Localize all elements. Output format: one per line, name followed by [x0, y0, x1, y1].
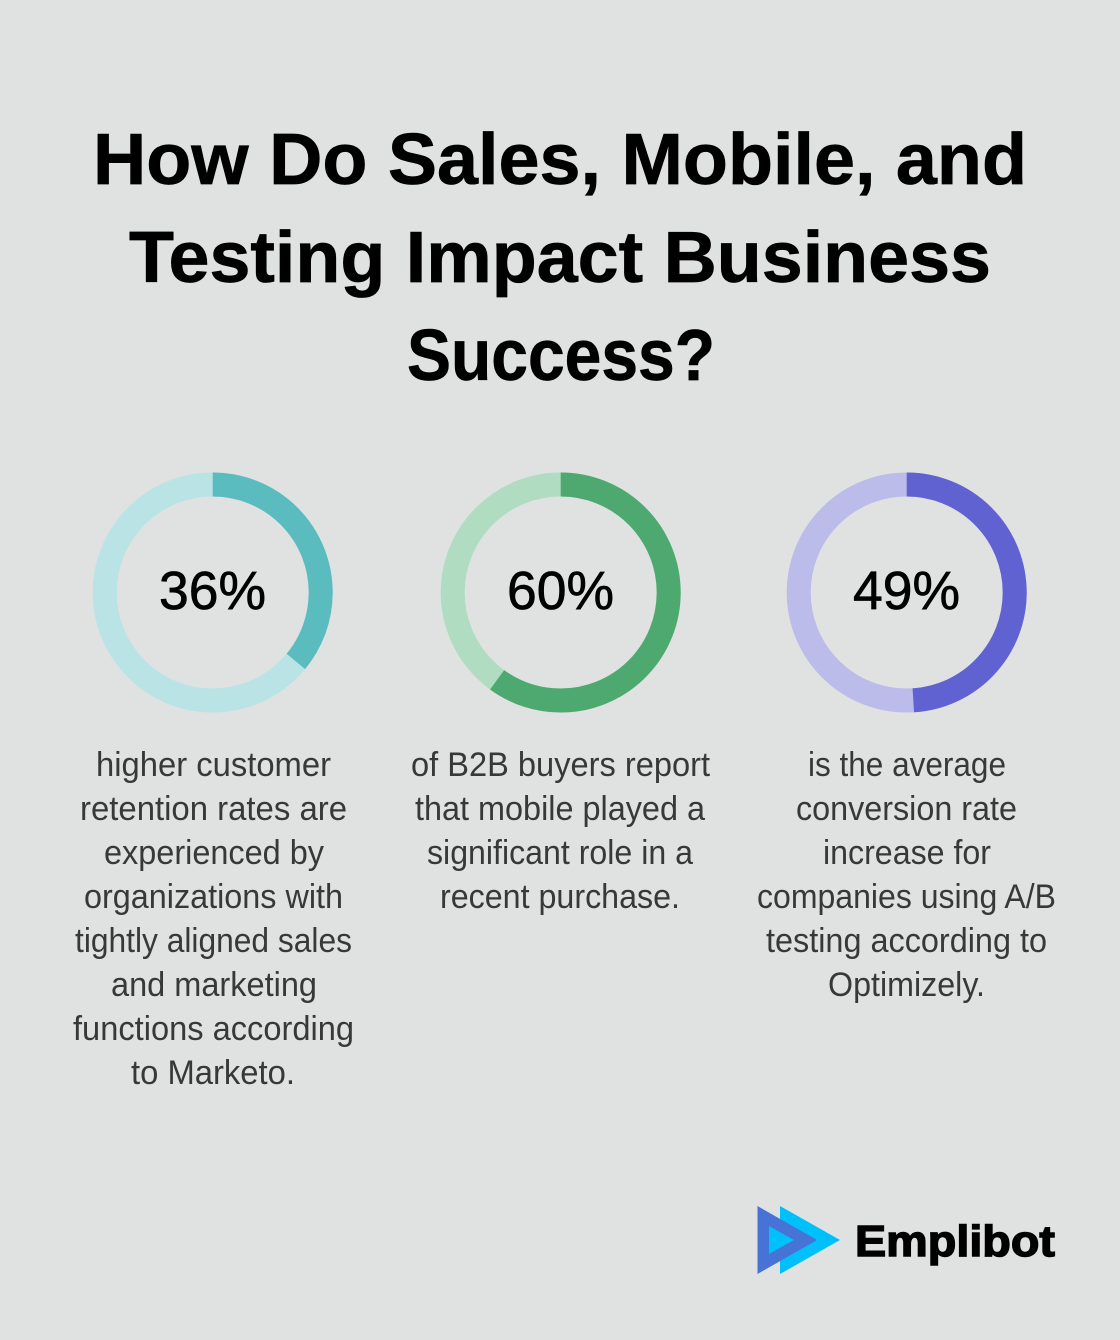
- description: A/B testing: testing according to: [766, 922, 1047, 960]
- title: Testing Impact Business: [129, 218, 991, 298]
- description: A/B testing: companies using A/B: [757, 878, 1056, 916]
- description: customer retention: functions according: [73, 1010, 354, 1048]
- description: customer retention: and marketing: [111, 966, 317, 1004]
- title: Success?: [407, 316, 715, 396]
- description: A/B testing: Optimizely.: [828, 966, 985, 1004]
- description: A/B testing: [757, 746, 1056, 1004]
- panel: customer retention statistic: [73, 484, 354, 1092]
- title: How Do Sales, Mobile, and: [93, 120, 1027, 200]
- donut chart: 49%: [799, 484, 1015, 700]
- description: customer retention: organizations with: [84, 878, 343, 916]
- description: customer retention: tightly aligned sales: [75, 922, 352, 960]
- description: customer retention: higher customer: [96, 746, 331, 784]
- donut chart: 36%: [105, 484, 321, 700]
- title: [93, 120, 1027, 396]
- description: A/B testing: conversion rate: [796, 790, 1017, 828]
- description: A/B testing: is the average: [808, 746, 1006, 784]
- description: customer retention: experienced by: [104, 834, 324, 872]
- value: 49%: 49%: [853, 561, 960, 621]
- description: B2B mobile: [411, 746, 711, 916]
- description: B2B mobile: significant role in a: [427, 834, 693, 872]
- logo: Emplibot: [758, 1206, 1055, 1274]
- wordmark: Emplibot: [855, 1217, 1055, 1266]
- description: B2B mobile: of B2B buyers report: [411, 746, 711, 784]
- value: 60%: 60%: [507, 561, 614, 621]
- description: customer retention: retention rates are: [80, 790, 347, 828]
- panel: A/B testing statistic: [757, 484, 1056, 1004]
- description: B2B mobile: recent purchase.: [440, 878, 680, 916]
- panel: B2B mobile statistic: [411, 484, 711, 916]
- value: 36%: 36%: [159, 561, 266, 621]
- description: A/B testing: increase for: [823, 834, 991, 872]
- description: customer retention: to Marketo.: [131, 1054, 295, 1092]
- icon: play triangles: [758, 1206, 840, 1274]
- description: B2B mobile: that mobile played a: [415, 790, 705, 828]
- donut chart: 60%: [453, 484, 669, 700]
- description: customer retention: [73, 746, 354, 1092]
